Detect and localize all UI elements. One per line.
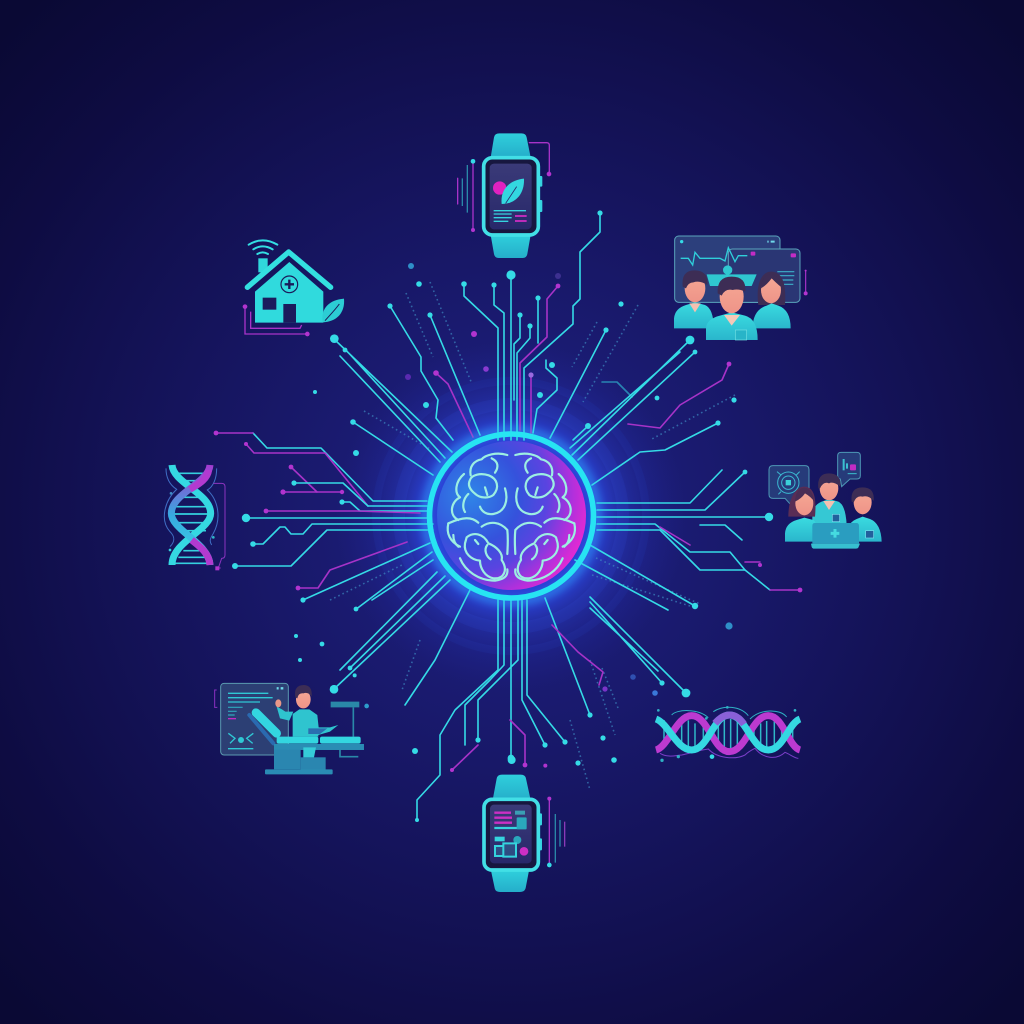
- person: right clinician: [848, 487, 882, 542]
- icon: smartwatch with leaf (top): [458, 133, 551, 258]
- person: left clinician: [785, 487, 818, 542]
- clinician: [275, 685, 338, 737]
- glowing ring: [430, 434, 594, 598]
- speech bubble with mini chart: [838, 452, 860, 487]
- circuit traces: bottom: [294, 572, 690, 822]
- speech bubble with chart circle: [769, 466, 809, 506]
- icon: patient exam chair with clinician and panel: [215, 673, 369, 774]
- sphere: [437, 441, 586, 590]
- icon: medical team with monitor screens: [674, 236, 808, 340]
- circuit traces: top: [387, 210, 632, 440]
- exam chair: [249, 713, 364, 774]
- dotted tick traces: [330, 282, 735, 790]
- icon: care team with laptop and speech bubbles: [769, 452, 882, 549]
- icon: horizontal DNA helix: [656, 706, 800, 762]
- circuit traces: right: [575, 470, 802, 630]
- person: centre clinician: [706, 277, 758, 340]
- icon: vertical DNA helix: [164, 465, 225, 570]
- person: right clinician: [753, 272, 791, 328]
- circuit traces: upper diagonals: [313, 336, 737, 485]
- circuit traces: left: [214, 431, 433, 611]
- laptop: [811, 523, 860, 549]
- person: left clinician: [674, 270, 714, 328]
- lamp arm: [331, 702, 359, 757]
- central brain orb: [426, 430, 598, 602]
- data panel: [221, 683, 288, 755]
- ring glow: [426, 430, 598, 602]
- central glow halo: [336, 341, 686, 691]
- icon: smartwatch with dashboard (bottom): [484, 756, 565, 892]
- icon: smart home with medical cross: [243, 240, 344, 343]
- person: back clinician: [812, 473, 847, 525]
- brain line art: [448, 454, 575, 581]
